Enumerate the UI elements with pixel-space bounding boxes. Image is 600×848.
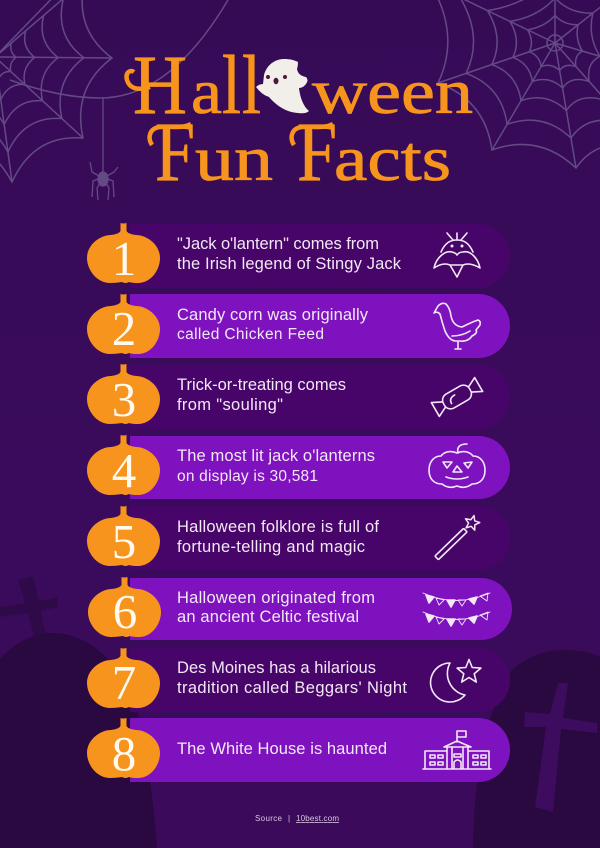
source line xyxy=(255,814,339,823)
panel: fact 6: 6 xyxy=(113,584,137,639)
panel: fact 4: on display is 30,581 xyxy=(177,468,318,485)
icon: carved pumpkin xyxy=(429,444,485,487)
panel: fact 3: Trick-or-treating comes xyxy=(177,376,346,394)
panel: fact 6: an ancient Celtic festival xyxy=(177,608,359,626)
title: ween xyxy=(312,56,473,127)
title xyxy=(127,38,473,199)
icon: moon and star xyxy=(431,660,481,702)
panel: fact 3 xyxy=(87,364,510,429)
source line: 10best.com xyxy=(296,814,339,823)
panel: fact 1 xyxy=(87,223,510,288)
icon: magic wand xyxy=(435,514,481,560)
panel: fact 4: 4 xyxy=(112,443,136,498)
panel: fact 5: 5 xyxy=(112,514,136,569)
panel: fact 7: 7 xyxy=(112,655,136,710)
panel: fact 1: the Irish legend of Stingy Jack xyxy=(177,255,402,273)
panel: fact 2: Candy corn was originally xyxy=(177,306,369,324)
title: a xyxy=(191,56,222,127)
title: l xyxy=(242,39,261,132)
panel: fact 2: called Chicken Feed xyxy=(177,326,324,343)
panel: fact 8: 8 xyxy=(112,726,136,781)
title: H xyxy=(133,38,187,132)
title: l xyxy=(222,39,241,132)
panel: fact 6: Halloween originated from xyxy=(177,589,375,607)
panel: fact 8: The White House is haunted xyxy=(177,740,387,758)
spider web: top left xyxy=(0,0,228,182)
panel: fact 8 xyxy=(87,718,510,782)
panel: fact 1: 1 xyxy=(112,231,136,286)
source line: Source xyxy=(255,814,283,823)
left gravestone with cross xyxy=(0,576,157,848)
spider web: top right xyxy=(430,0,600,168)
icon: ghost xyxy=(256,59,309,113)
panel: fact 2 xyxy=(87,294,510,358)
panel: fact 5: Halloween folklore is full of xyxy=(177,518,379,536)
source line: | xyxy=(288,814,290,823)
panel: fact 4: The most lit jack o'lanterns xyxy=(177,447,375,465)
icon: bunting flags xyxy=(423,593,490,626)
icon: white house building xyxy=(423,731,491,769)
panel: fact 6 xyxy=(88,577,512,640)
panel: fact 5: fortune-telling and magic xyxy=(177,538,365,556)
panel: fact 4 xyxy=(87,435,510,499)
title: F xyxy=(297,105,337,199)
panel: fact 7: tradition called Beggars' Night xyxy=(177,679,407,697)
panel: fact 3: from "souling" xyxy=(177,396,283,414)
title: F xyxy=(155,105,195,199)
right gravestone with cross xyxy=(473,650,600,848)
icon: chicken xyxy=(434,303,480,349)
panel: fact 2: 2 xyxy=(112,301,136,356)
title: un xyxy=(195,123,273,194)
panel: fact 1: "Jack o'lantern" comes from xyxy=(177,235,379,253)
panel: fact 3: 3 xyxy=(112,372,136,427)
icon: candy xyxy=(431,378,483,416)
panel: fact 7 xyxy=(87,648,510,712)
panel: fact 5 xyxy=(87,506,510,570)
icon: jack-o'-lantern bird face xyxy=(434,233,480,277)
panel: fact 7: Des Moines has a hilarious xyxy=(177,659,376,677)
title: acts xyxy=(334,123,451,194)
spider on thread xyxy=(90,98,118,200)
